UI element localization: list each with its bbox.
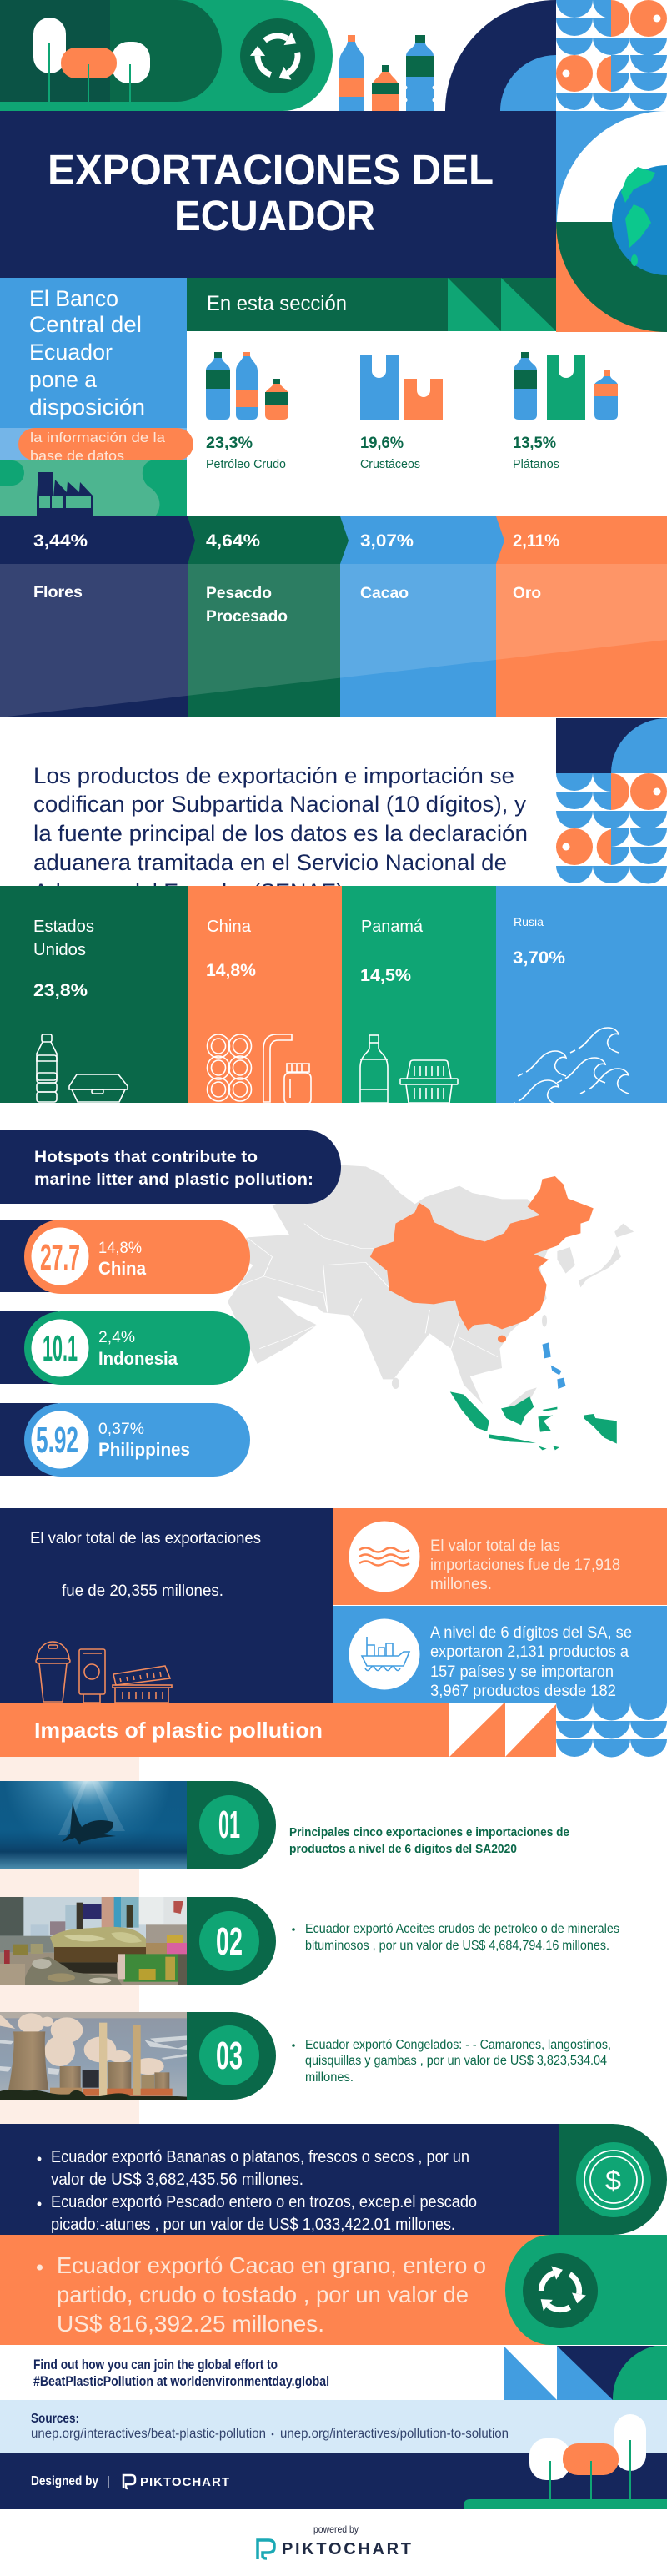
icon: bottle and container [360,1035,458,1103]
hotspot: China: 27.7 [40,1237,80,1278]
factory landscape [0,460,187,516]
icon: bottle and box [37,1034,128,1102]
sources [0,2400,667,2453]
labels: 23,3% [206,435,253,452]
logo: PIKTOCHART [140,2475,229,2489]
panel: four product columns: Oro [513,585,541,602]
item 01: 01 [218,1803,240,1846]
icon: dollar: $ [605,2166,621,2196]
heading: impacts: Impacts of plastic pollution [34,1718,323,1743]
heading: hotspots: Hotspots that contribute to [34,1148,258,1166]
panel: bananas and fish: Ecuador exportó Pescado entero o en trozos, excep.el pescado [51,2193,477,2211]
panel: cacao: Ecuador exportó Cacao en grano, entero o [57,2252,486,2278]
text block: description: codifican por Subpartida Nacional (10 dígitos), y [33,792,527,817]
panel: export total: fue de 20,355 millones. [62,1582,223,1600]
intro text: disposición [29,395,145,420]
title: ECUADOR [174,192,375,239]
panel: cacao [0,2235,667,2345]
panel: four product columns [0,516,667,717]
heading: impacts [0,1703,667,1757]
panel: import total: importaciones fue de 17,918 [430,1557,620,1574]
icon: bottles 1 [206,352,288,420]
panel: bananas and fish: picado:-atunes , por un valor de US$ 1,033,422.01 millones. [51,2216,455,2234]
item 03: millones. [305,2070,354,2085]
panel: four product columns: 3,07% [360,531,414,551]
country: Estados Unidos: Unidos [33,941,86,959]
trees [33,18,150,102]
call to action [33,2346,667,2400]
hotspot: Philippines: 0,37% [98,1421,144,1438]
icon: wave lines [359,1548,409,1565]
photo: garbage truck [0,1897,187,1985]
text block: description: Aduanas del Ecuador (SENAE) [33,879,344,904]
labels: Crustáceos [360,458,420,471]
globe panel [556,111,667,332]
pattern top [556,0,667,111]
icon: waves [510,1028,629,1105]
panel: import total: El valor total de las [430,1537,560,1555]
photo: sea turtle [0,1781,187,1869]
country: Panama: 14,5% [360,966,411,985]
panel: six digit products [333,1606,667,1703]
panel: bananas and fish [0,2124,667,2235]
peach strip [0,1757,139,2124]
icon: plastic items [36,1642,172,1703]
country: Russia [496,886,667,1105]
heading: hotspots [0,1130,341,1204]
text block: description: la fuente principal de los datos es la declaración [33,821,528,846]
powered by: powered by [313,2523,359,2535]
labels [206,435,559,471]
hotspot: Philippines: Philippines [98,1439,190,1460]
panel: import total: millones. [430,1576,492,1593]
icon: globe [612,165,667,275]
panel: intro [0,278,193,516]
map of Asia [228,1165,634,1450]
labels: 19,6% [360,435,404,452]
panel: bananas and fish: valor de US$ 3,682,435.56 millones. [51,2171,303,2189]
panel: section header: En esta sección [207,292,347,315]
sources: unep.org/interactives/beat-plastic-pollution [31,2427,266,2441]
panel: countries [0,886,667,1105]
item 03: 03 [216,2034,243,2077]
country: Russia: 3,70% [513,948,565,968]
panel: six digit products: A nivel de 6 dígitos del SA, se [430,1624,632,1642]
labels: Plátanos [513,458,559,471]
country: Estados Unidos [0,886,188,1103]
icon: recycle [523,2253,598,2328]
text block: description [33,763,528,904]
intro text: Central del [29,312,142,337]
item 01: Principales cinco exportaciones e importaciones de [289,1826,569,1839]
hotspot: Indonesia: 2,4% [98,1329,135,1346]
panel: four product columns: Procesado [206,608,288,626]
country: Russia: Rusia [514,915,544,928]
panel: four product columns: Pesacdo [206,585,272,602]
hotspot: China: 14,8% [98,1240,142,1257]
top illustration band [0,0,556,111]
call to action: #BeatPlasticPollution at worldenvironmentday.global [33,2373,329,2389]
title: EXPORTACIONES DEL [48,146,494,194]
photo: power plant [0,2012,187,2100]
orange pill: base de datos [30,448,124,464]
panel: four product columns: 4,64% [206,531,260,551]
intro text [29,286,145,420]
country: Panama [342,886,496,1103]
item 01: productos a nivel de 6 dígitos del SA2020 [289,1843,517,1856]
icon: ship [362,1637,409,1670]
text block: description: aduanera tramitada en el Servicio Nacional de [33,850,507,875]
green capsule [0,0,333,111]
labels: 13,5% [513,435,556,452]
orange pill: la información de la [30,430,166,445]
item 03: Ecuador exportó Congelados: - - Camarones, langostinos, [305,2038,611,2052]
panel: bananas and fish: Ecuador exportó Bananas o platanos, frescos o secos , por un [51,2148,469,2166]
icon: rings, straw, jar [207,1034,311,1104]
hotspot: Philippines: 5.92 [36,1420,78,1461]
sources: Sources: [31,2412,79,2426]
panel: four product columns: Cacao [360,585,409,602]
panel: cacao: partido, crudo o tostado , por un valor de [57,2282,469,2307]
decoration: triangles [504,2346,667,2400]
country: China: 14,8% [206,961,256,980]
item 01 [0,1781,569,1869]
title panel [0,111,556,278]
footer [0,2414,667,2509]
text block: description: Los productos de exportación e importación se [33,763,514,788]
icon: dollar [576,2142,651,2217]
country: China [188,886,342,1104]
ground [464,2499,667,2509]
hotspot: Philippines [0,1403,250,1477]
item 02: 02 [216,1919,243,1963]
heading: hotspots: marine litter and plastic pollution: [34,1170,313,1189]
hotspot: Indonesia: 10.1 [43,1328,78,1369]
panel: export total: El valor total de las exportaciones [30,1530,261,1547]
item 02 [0,1897,619,1985]
icon: bags [360,355,443,420]
country: China: China [207,918,252,936]
intro text: pone a [29,367,98,392]
panel: cacao: US$ 816,392.25 millones. [57,2311,324,2337]
panel: export total [0,1508,333,1703]
logo: PIKTOCHART [282,2540,411,2558]
panel: six digit products: 3,967 productos desde 182 [430,1683,616,1700]
item 02: bituminosos , por un valor de US$ 4,684,794.16 millones. [305,1939,609,1953]
intro text: El Banco [29,286,118,311]
country: Estados Unidos: 23,8% [33,981,88,1000]
orange pill [18,428,193,464]
decoration: right pattern [556,718,667,884]
trees [529,2414,646,2499]
hotspot: Indonesia: Indonesia [98,1348,178,1369]
icon: recycle [240,18,315,93]
panel: section header [187,278,556,331]
panel: import total [333,1508,667,1605]
title [48,146,494,239]
panel: four product columns: Flores [33,584,83,601]
panel: six digit products: exportaron 2,131 productos a [430,1643,629,1661]
panel: six digit products: 157 países y se importaron [430,1663,614,1681]
item 03 [0,2012,611,2100]
panel: four product columns: 3,44% [33,531,88,551]
item 03: quisquillas y gambas , por un valor de US$ 3,823,534.04 [305,2054,607,2068]
hotspot: Indonesia [0,1311,250,1385]
country: Panama: Panamá [361,918,424,936]
hotspot: China: China [98,1258,147,1279]
icon: bottle and bag [514,352,618,420]
sources: unep.org/interactives/pollution-to-solution [280,2427,509,2441]
dark capsule [0,0,222,102]
country: Estados Unidos: Estados [33,918,94,936]
powered by [258,2523,411,2559]
panel: four product columns: 2,11% [513,531,559,551]
item 02: Ecuador exportó Aceites crudos de petroleo o de minerales [305,1922,619,1936]
bottles [339,35,437,111]
arch [445,0,556,111]
labels: Petróleo Crudo [206,458,286,471]
hotspot: China [0,1220,250,1294]
panel: top products [206,352,618,471]
call to action: Find out how you can join the global effort to [33,2357,278,2372]
footer: Designed by [31,2474,98,2488]
intro text: Ecuador [29,340,113,365]
